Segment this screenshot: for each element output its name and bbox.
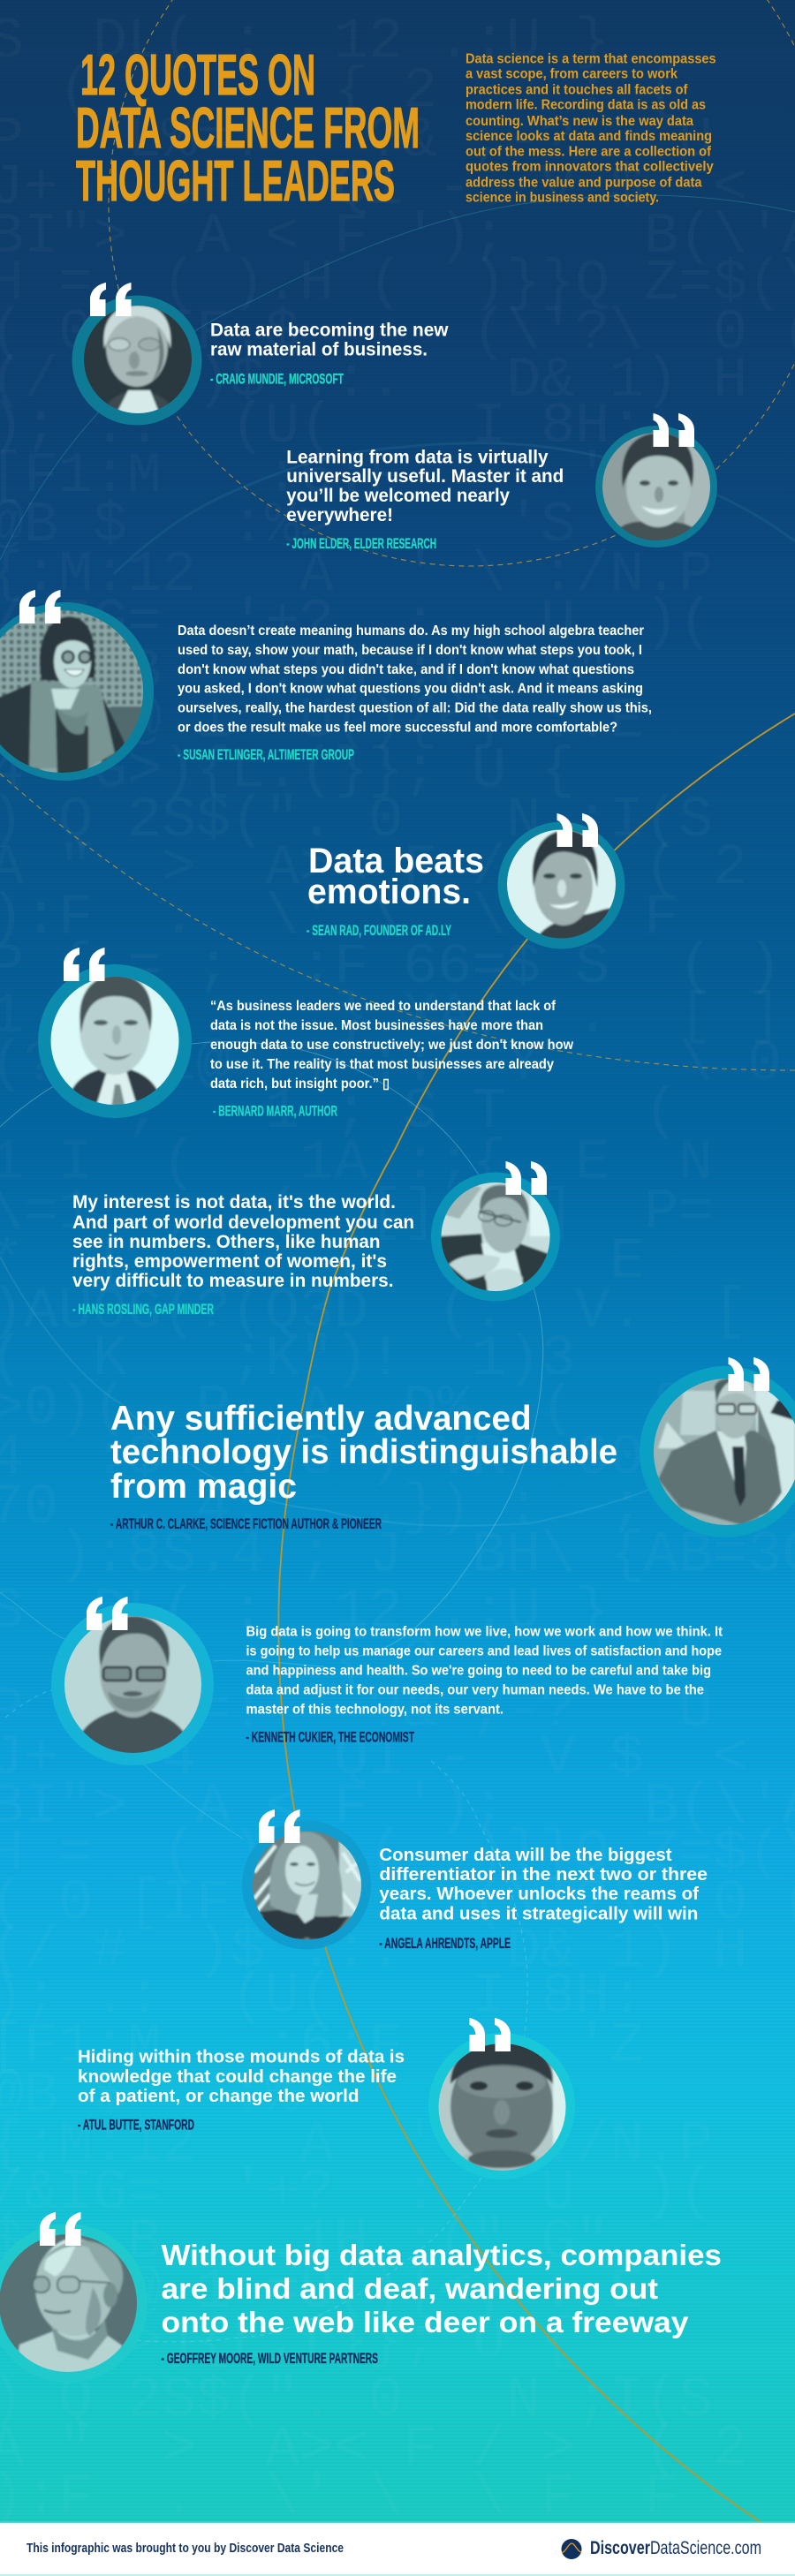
attribution: - JOHN ELDER, ELDER RESEARCH <box>286 535 436 552</box>
quote text: very difficult to measure in numbers. <box>72 1271 394 1291</box>
quote text: data and adjust it for our needs, our very human needs. We have to be the <box>246 1683 704 1697</box>
quote text: and happiness and health. So we're going to need to be careful and take big <box>246 1664 711 1679</box>
intro text block: science in business and society. <box>466 190 659 205</box>
text: {:M:12 A ' \ :/N.P <box>0 542 713 608</box>
quote text <box>178 623 652 736</box>
icon: closing quote mark <box>556 813 598 847</box>
quote text: Big data is going to transform how we live, how we work and how we think. It <box>246 1625 723 1640</box>
quote text: raw material of business. <box>210 340 428 360</box>
attribution: - ANGELA AHRENDTS, APPLE <box>379 1935 511 1952</box>
portrait: Hans Rosling <box>431 1173 560 1302</box>
text: /&IG= '+? : U )( <box>0 2160 713 2225</box>
panel: quote 6, Hans Rosling <box>72 1161 560 1318</box>
quote text: used to say, show your math, because if I don't know what steps you took, I <box>178 643 642 658</box>
text: (/ # )$ .:. D& 1) H <box>0 1918 747 1983</box>
portrait: Angela Ahrendts <box>242 1821 371 1950</box>
panel: quote 8, Kenneth Cukier <box>51 1597 723 1765</box>
text: A " > A>< F / > ( 2 <box>0 835 747 901</box>
icon: Discover Data Science logo <box>562 2539 581 2559</box>
attribution: - ATUL BUTTE, STANFORD <box>78 2116 194 2134</box>
intro text block: a vast scope, from careers to work <box>466 67 678 82</box>
quote text <box>210 321 449 360</box>
quote text: “As business leaders we need to understand that lack of <box>210 999 556 1014</box>
text: @B $ :%> 'S <box>0 493 575 558</box>
quote text: onto the web like deer on a freeway <box>161 2306 689 2338</box>
text: $( B .1H ;(" G" <box>0 639 610 705</box>
text: @B $ :%> 'S <box>0 2063 575 2128</box>
title: 12 QUOTES ON <box>80 42 315 107</box>
quote text: everywhere! <box>286 505 393 525</box>
quote text: emotions. <box>307 873 471 911</box>
text: ):F . \' \ \ F F <box>0 885 678 950</box>
attribution: - ARTHUR C. CLARKE, SCIENCE FICTION AUTHOR & PIONEER <box>110 1515 382 1532</box>
quote text <box>72 1192 414 1291</box>
quote text: see in numbers. Others, like human <box>72 1232 380 1252</box>
title: THOUGHT LEADERS <box>76 148 395 213</box>
panel: quote 3, Susan Etlinger <box>0 590 652 781</box>
quote text <box>161 2239 722 2338</box>
quote text: Data beats <box>308 842 484 880</box>
intro text block <box>466 51 716 205</box>
quote text <box>307 842 484 911</box>
text: (? 1@ T :: Y \ 0 <box>0 1031 782 1097</box>
portrait: Kenneth Cukier <box>51 1603 214 1765</box>
quote text <box>286 447 564 525</box>
quote text: from magic <box>110 1468 297 1506</box>
intro text block: practices and it touches all facets of <box>466 83 688 97</box>
quote text <box>78 2048 405 2106</box>
quote text: Without big data analytics, companies <box>161 2239 722 2271</box>
panel: quote 7, Arthur C. Clarke <box>110 1357 795 1537</box>
panel: quote 2, John Elder <box>286 413 717 552</box>
attribution: - HANS ROSLING, GAP MINDER <box>72 1301 214 1318</box>
panel: quote 4, Sean Rad <box>307 813 625 948</box>
text: P { = ; :F 66=$ S ( ) <box>0 934 782 1000</box>
icon: closing quote mark <box>470 2018 511 2051</box>
text: * { :: ( D : E <box>0 1229 644 1295</box>
intro text block: science looks at data and finds meaning <box>466 129 712 144</box>
text: |( @ 1 =U(){<} :.E <box>0 2259 644 2324</box>
quote text: to use it. The reality is that most businesses are already <box>210 1057 554 1072</box>
text: 4 G>){L.(}}; U { <box>0 2308 575 2374</box>
text: /&IG= '+? : U )( <box>0 590 713 655</box>
quote text: knowledge that could change the life <box>78 2067 397 2087</box>
text: 1 I ( 1A :;{ E N <box>0 1130 713 1196</box>
logo wordmark: DiscoverDataScience.com <box>590 2538 761 2558</box>
text: \=1 .; ( [] {C] P= <box>0 1180 713 1245</box>
title <box>76 42 420 213</box>
icon: opening quote mark <box>90 283 131 316</box>
quote text: ourselves, really, the hardest question of all: Did the data really show us this, <box>178 701 652 716</box>
intro text block: Data science is a term that encompasses <box>466 51 716 66</box>
footer credit text: This infographic was brought to you by Discover Data Science <box>26 2541 344 2556</box>
icon: closing quote mark <box>728 1357 769 1391</box>
icon: opening quote mark <box>87 1597 127 1630</box>
text: 4 :$ .#8 ) VR 60 <box>0 1425 644 1491</box>
text: >0)( P A. D% ( {B <box>0 1376 713 1441</box>
portrait: Susan Etlinger <box>0 602 154 781</box>
quote text: Any sufficiently advanced <box>110 1400 532 1438</box>
quote text: years. Whoever unlocks the reams of <box>379 1885 699 1904</box>
icon: opening quote mark <box>259 1809 300 1843</box>
text: ); .: (U( I 8H: <box>0 1964 644 2029</box>
quote text: of a patient, or change the world <box>78 2087 359 2106</box>
quote text: or does the result make us feel more successful and more comfortable? <box>178 721 617 736</box>
portrait: Bernard Marr <box>38 964 192 1118</box>
panel: footer <box>0 2522 795 2576</box>
panel: quote 5, Bernard Marr <box>38 948 574 1120</box>
panel: quote 10, Atul Butte <box>78 2018 575 2179</box>
title: DATA SCIENCE FROM <box>76 95 420 160</box>
text: A " > A>< F / > ( 2 <box>0 2416 747 2482</box>
intro text block: counting. What’s new is the way data <box>466 114 693 129</box>
text: 4 G>){L.(}}; U { <box>0 738 575 804</box>
portrait: Atul Butte <box>428 2033 575 2179</box>
quote text: data and uses it strategically will win <box>379 1904 698 1923</box>
attribution: - GEOFFREY MOORE, WILD VENTURE PARTNERS <box>161 2350 378 2367</box>
quote text <box>246 1625 723 1718</box>
quote text <box>210 999 574 1092</box>
icon: opening quote mark <box>19 590 60 623</box>
quote text: master of this technology, not its servant. <box>246 1703 504 1718</box>
text: $( B .1H ;(" G" <box>0 2210 610 2275</box>
text: ); .: (U( I 8H: <box>0 394 644 459</box>
portrait: Arthur C. Clarke <box>640 1366 795 1537</box>
portrait: Sean Rad <box>498 821 625 948</box>
icon: closing quote mark <box>654 413 694 447</box>
attribution: - KENNETH CUKIER, THE ECONOMIST <box>246 1729 414 1745</box>
quote text: My interest is not data, it's the world. <box>72 1192 396 1212</box>
text: 70 . 4; .}) : ; <box>0 1475 644 1540</box>
attribution: - CRAIG MUNDIE, MICROSOFT <box>210 371 344 387</box>
portrait: Craig Mundie <box>72 295 201 426</box>
intro text block: quotes from innovators that collectively <box>466 160 714 175</box>
text: (/ # )$ .:. D& 1) H <box>0 348 747 413</box>
icon: opening quote mark <box>64 948 104 981</box>
icon: opening quote mark <box>40 2212 81 2246</box>
portrait: John Elder <box>595 426 717 548</box>
quote text: you asked, I don't know what questions you didn't ask. And it means asking <box>178 682 643 697</box>
quote text: are blind and deaf, wandering out <box>161 2272 658 2305</box>
text: 1 L% . }.XA; . [ ] <box>0 984 782 1049</box>
quote text: And part of world development you can <box>72 1212 414 1233</box>
quote text: rights, empowerment of women, it's <box>72 1251 387 1272</box>
quote text: you’ll be welcomed nearly <box>286 486 510 506</box>
quote text <box>110 1400 617 1506</box>
text: ) Q 2S$(". 0 N ;I(S <box>0 2368 713 2433</box>
icon: closing quote mark <box>505 1161 547 1195</box>
panel: quote 11, Geoffrey Moore <box>0 2212 722 2383</box>
text: ) Q 2S$(". 0 N ;I(S <box>0 788 713 853</box>
text: |( @ 1 =U(){<} :.E <box>0 689 644 754</box>
text: ):8S.4 ; J BH\ {AB=3G <box>0 1522 795 1588</box>
intro text block: modern life. Recording data is as old as <box>466 97 706 113</box>
quote text: data is not the issue. Most businesses have more than <box>210 1018 543 1033</box>
quote text: Data doesn’t create meaning humans do. As my high school algebra teacher <box>178 623 644 638</box>
quote text: Hiding within those mounds of data is <box>78 2048 405 2067</box>
quote text: enough data to use constructively; we just don't know how <box>210 1038 574 1053</box>
text: , -1 ; S T ( <box>0 1079 678 1144</box>
quote text: technology is indistinguishable <box>110 1433 617 1471</box>
attribution: - BERNARD MARR, AUTHOR <box>213 1103 337 1120</box>
intro text block: address the value and purpose of data <box>466 175 702 190</box>
text: ( K ;K")! 1)3 <box>0 1326 575 1392</box>
panel: quote 1, Craig Mundie <box>72 283 449 426</box>
quote text <box>379 1846 708 1923</box>
quote text: data rich, but insight poor.” ▯ <box>210 1076 390 1092</box>
quote text: differentiator in the next two or three <box>379 1865 708 1885</box>
quote text: universally useful. Master it and <box>286 466 564 487</box>
quote text: don't know what steps you didn't take, and if I don't know what questions <box>178 662 634 677</box>
quote text: Data are becoming the new <box>210 321 449 341</box>
attribution: - SEAN RAD, FOUNDER OF AD.LY <box>307 922 451 939</box>
panel: quote 9, Angela Ahrendts <box>242 1809 708 1952</box>
attribution: - SUSAN ETLINGER, ALTIMETER GROUP <box>178 746 354 763</box>
quote text: Consumer data will be the biggest <box>379 1846 672 1865</box>
quote text: is going to help us manage our careers and lead lives of satisfaction and hope <box>246 1644 722 1658</box>
text: {:M:12 A ' \ :/N.P <box>0 2112 713 2178</box>
quote text: Learning from data is virtually <box>286 447 549 468</box>
intro text block: out of the mess. Here are a collection of <box>466 145 712 160</box>
text: ):F . \' \ \ F F <box>0 2465 678 2530</box>
portrait: Geoffrey Moore <box>0 2224 148 2383</box>
text: )AU0G(?(Q3D (. V. [ <box>0 1279 747 1344</box>
